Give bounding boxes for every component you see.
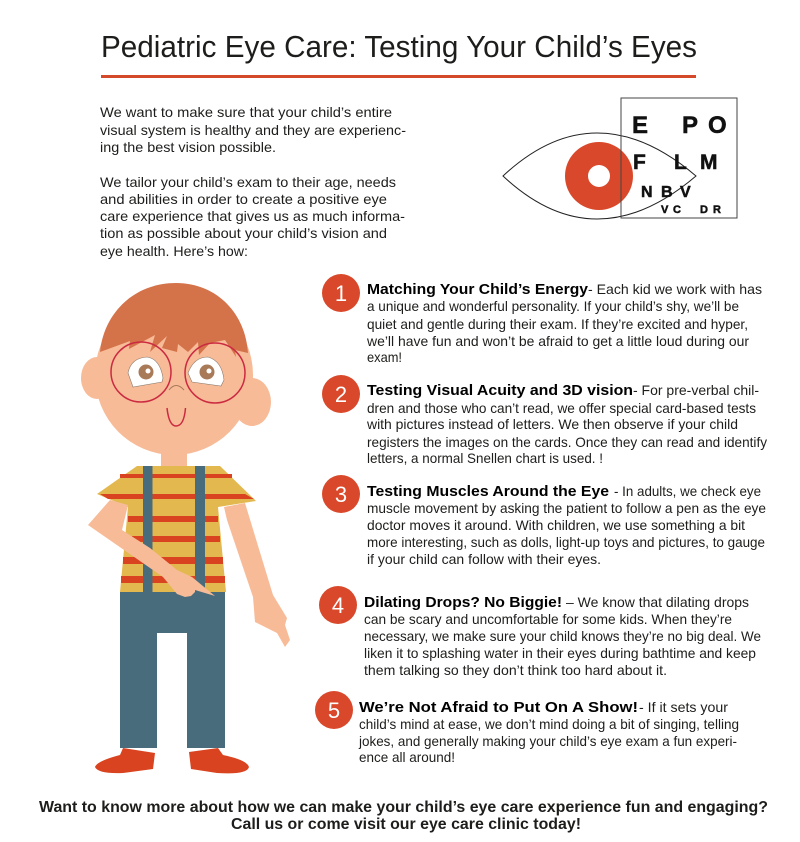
step 2	[322, 375, 767, 466]
step 4: liken it to splashing water in their eyes during bathtime and keep	[364, 645, 756, 661]
icon: eye and letter chart: D	[700, 204, 708, 216]
step 3: 3	[335, 482, 347, 507]
neck	[161, 445, 187, 469]
step 2: with pictures instead of letters. We then observe if your child	[366, 416, 738, 432]
step 3	[322, 475, 766, 567]
intro text: We tailor your child’s exam to their age, needs	[100, 174, 396, 190]
footer call to action: Want to know more about how we can make your child’s eye care experience fun and engaging?	[39, 799, 768, 816]
shoes	[95, 748, 155, 773]
icon: eye and letter chart: P	[682, 112, 698, 139]
intro text: We want to make sure that your child’s entire	[100, 104, 392, 120]
face	[95, 295, 253, 455]
step 2: Testing Visual Acuity and 3D vision	[367, 383, 633, 399]
step 2: registers the images on the cards. Once they can read and identify	[367, 434, 767, 450]
step 3: doctor moves it around. With children, we use something a bit	[367, 517, 745, 533]
intro text: eye health. Here’s how:	[100, 243, 248, 259]
step 5: ence all around!	[359, 749, 455, 765]
trousers	[120, 592, 225, 748]
step 1: quiet and gentle during their exam. If they’re excited and hyper,	[367, 316, 748, 332]
left arm back	[224, 503, 290, 647]
glasses	[111, 342, 171, 402]
step 3: - In adults, we check eye	[614, 483, 761, 499]
intro text: ing the best vision possible.	[100, 139, 276, 155]
pointing arm	[88, 500, 215, 597]
title rule	[101, 75, 696, 78]
striped shirt	[97, 466, 256, 592]
step 4: Dilating Drops? No Biggie!	[364, 595, 562, 611]
intro text: care experience that gives us as much informa-	[100, 208, 405, 224]
step 1: a unique and wonderful personality. If your child’s shy, we’ll be	[367, 298, 739, 314]
step 3: more interesting, such as dolls, light-up toys and pictures, to gauge	[367, 534, 765, 550]
intro text: visual system is healthy and they are experienc-	[100, 122, 406, 138]
step 5	[315, 691, 739, 765]
step 1: - Each kid we work with has	[588, 281, 762, 297]
icon: eye and letter chart	[503, 98, 737, 219]
ears	[81, 357, 113, 399]
icon: eye and letter chart: V	[661, 204, 669, 216]
icon: eye and letter chart: B	[661, 184, 673, 201]
footer call to action	[39, 799, 768, 833]
step 2: letters, a normal Snellen chart is used. !	[367, 450, 603, 466]
eyes	[128, 357, 163, 387]
icon: eye and letter chart: C	[673, 204, 681, 216]
step 3: if your child can follow with their eyes.	[367, 551, 601, 567]
step 2: - For pre-verbal chil-	[633, 382, 759, 398]
intro text: tion as possible about your child’s vision and	[100, 225, 387, 241]
step 3: muscle movement by asking the patient to follow a pen as the eye	[367, 500, 766, 516]
mouth	[167, 408, 186, 426]
step 4: – We know that dilating drops	[566, 594, 749, 610]
step 4: them talking so they don’t think too hard about it.	[364, 662, 667, 678]
step 1: exam!	[367, 349, 402, 365]
illustration: boy with glasses	[81, 283, 290, 773]
step 4: 4	[332, 593, 344, 618]
step 2: dren and those who can’t read, we offer special card-based tests	[367, 400, 756, 416]
icon: eye and letter chart: M	[700, 151, 718, 174]
intro text: and abilities in order to create a positive eye	[100, 191, 387, 207]
step 5: child’s mind at ease, we don’t mind doing a bit of singing, telling	[359, 716, 739, 732]
icon: eye and letter chart: F	[633, 151, 646, 174]
step 1	[322, 274, 762, 365]
step 1: we’ll have fun and won’t be afraid to get a little loud during our	[366, 333, 749, 349]
icon: eye and letter chart: N	[641, 184, 653, 201]
step 4	[319, 586, 761, 678]
icon: eye and letter chart: E	[632, 112, 648, 139]
step 5: We’re Not Afraid to Put On A Show!	[359, 700, 638, 716]
nose	[169, 386, 184, 390]
hair	[100, 283, 248, 357]
step 2: 2	[335, 382, 347, 407]
step 5: jokes, and generally making your child’s eye exam a fun experi-	[358, 733, 737, 749]
suspenders	[143, 466, 152, 592]
step 1: 1	[335, 281, 347, 306]
footer call to action: Call us or come visit our eye care clinic today!	[231, 816, 581, 833]
step 4: necessary, we make sure your child knows they’re no big deal. We	[364, 628, 761, 644]
icon: eye and letter chart: R	[713, 204, 721, 216]
intro text	[100, 104, 406, 259]
step 5: 5	[328, 698, 340, 723]
step 5: - If it sets your	[639, 699, 728, 715]
title: Pediatric Eye Care: Testing Your Child’s Eyes	[101, 29, 697, 64]
step 3: Testing Muscles Around the Eye	[367, 484, 609, 500]
icon: eye and letter chart: O	[708, 112, 727, 139]
step 4: can be scary and uncomfortable for some kids. When they’re	[364, 611, 732, 627]
icon: eye and letter chart: V	[680, 184, 691, 201]
step 1: Matching Your Child’s Energy	[367, 282, 588, 298]
icon: eye and letter chart: L	[674, 151, 687, 174]
